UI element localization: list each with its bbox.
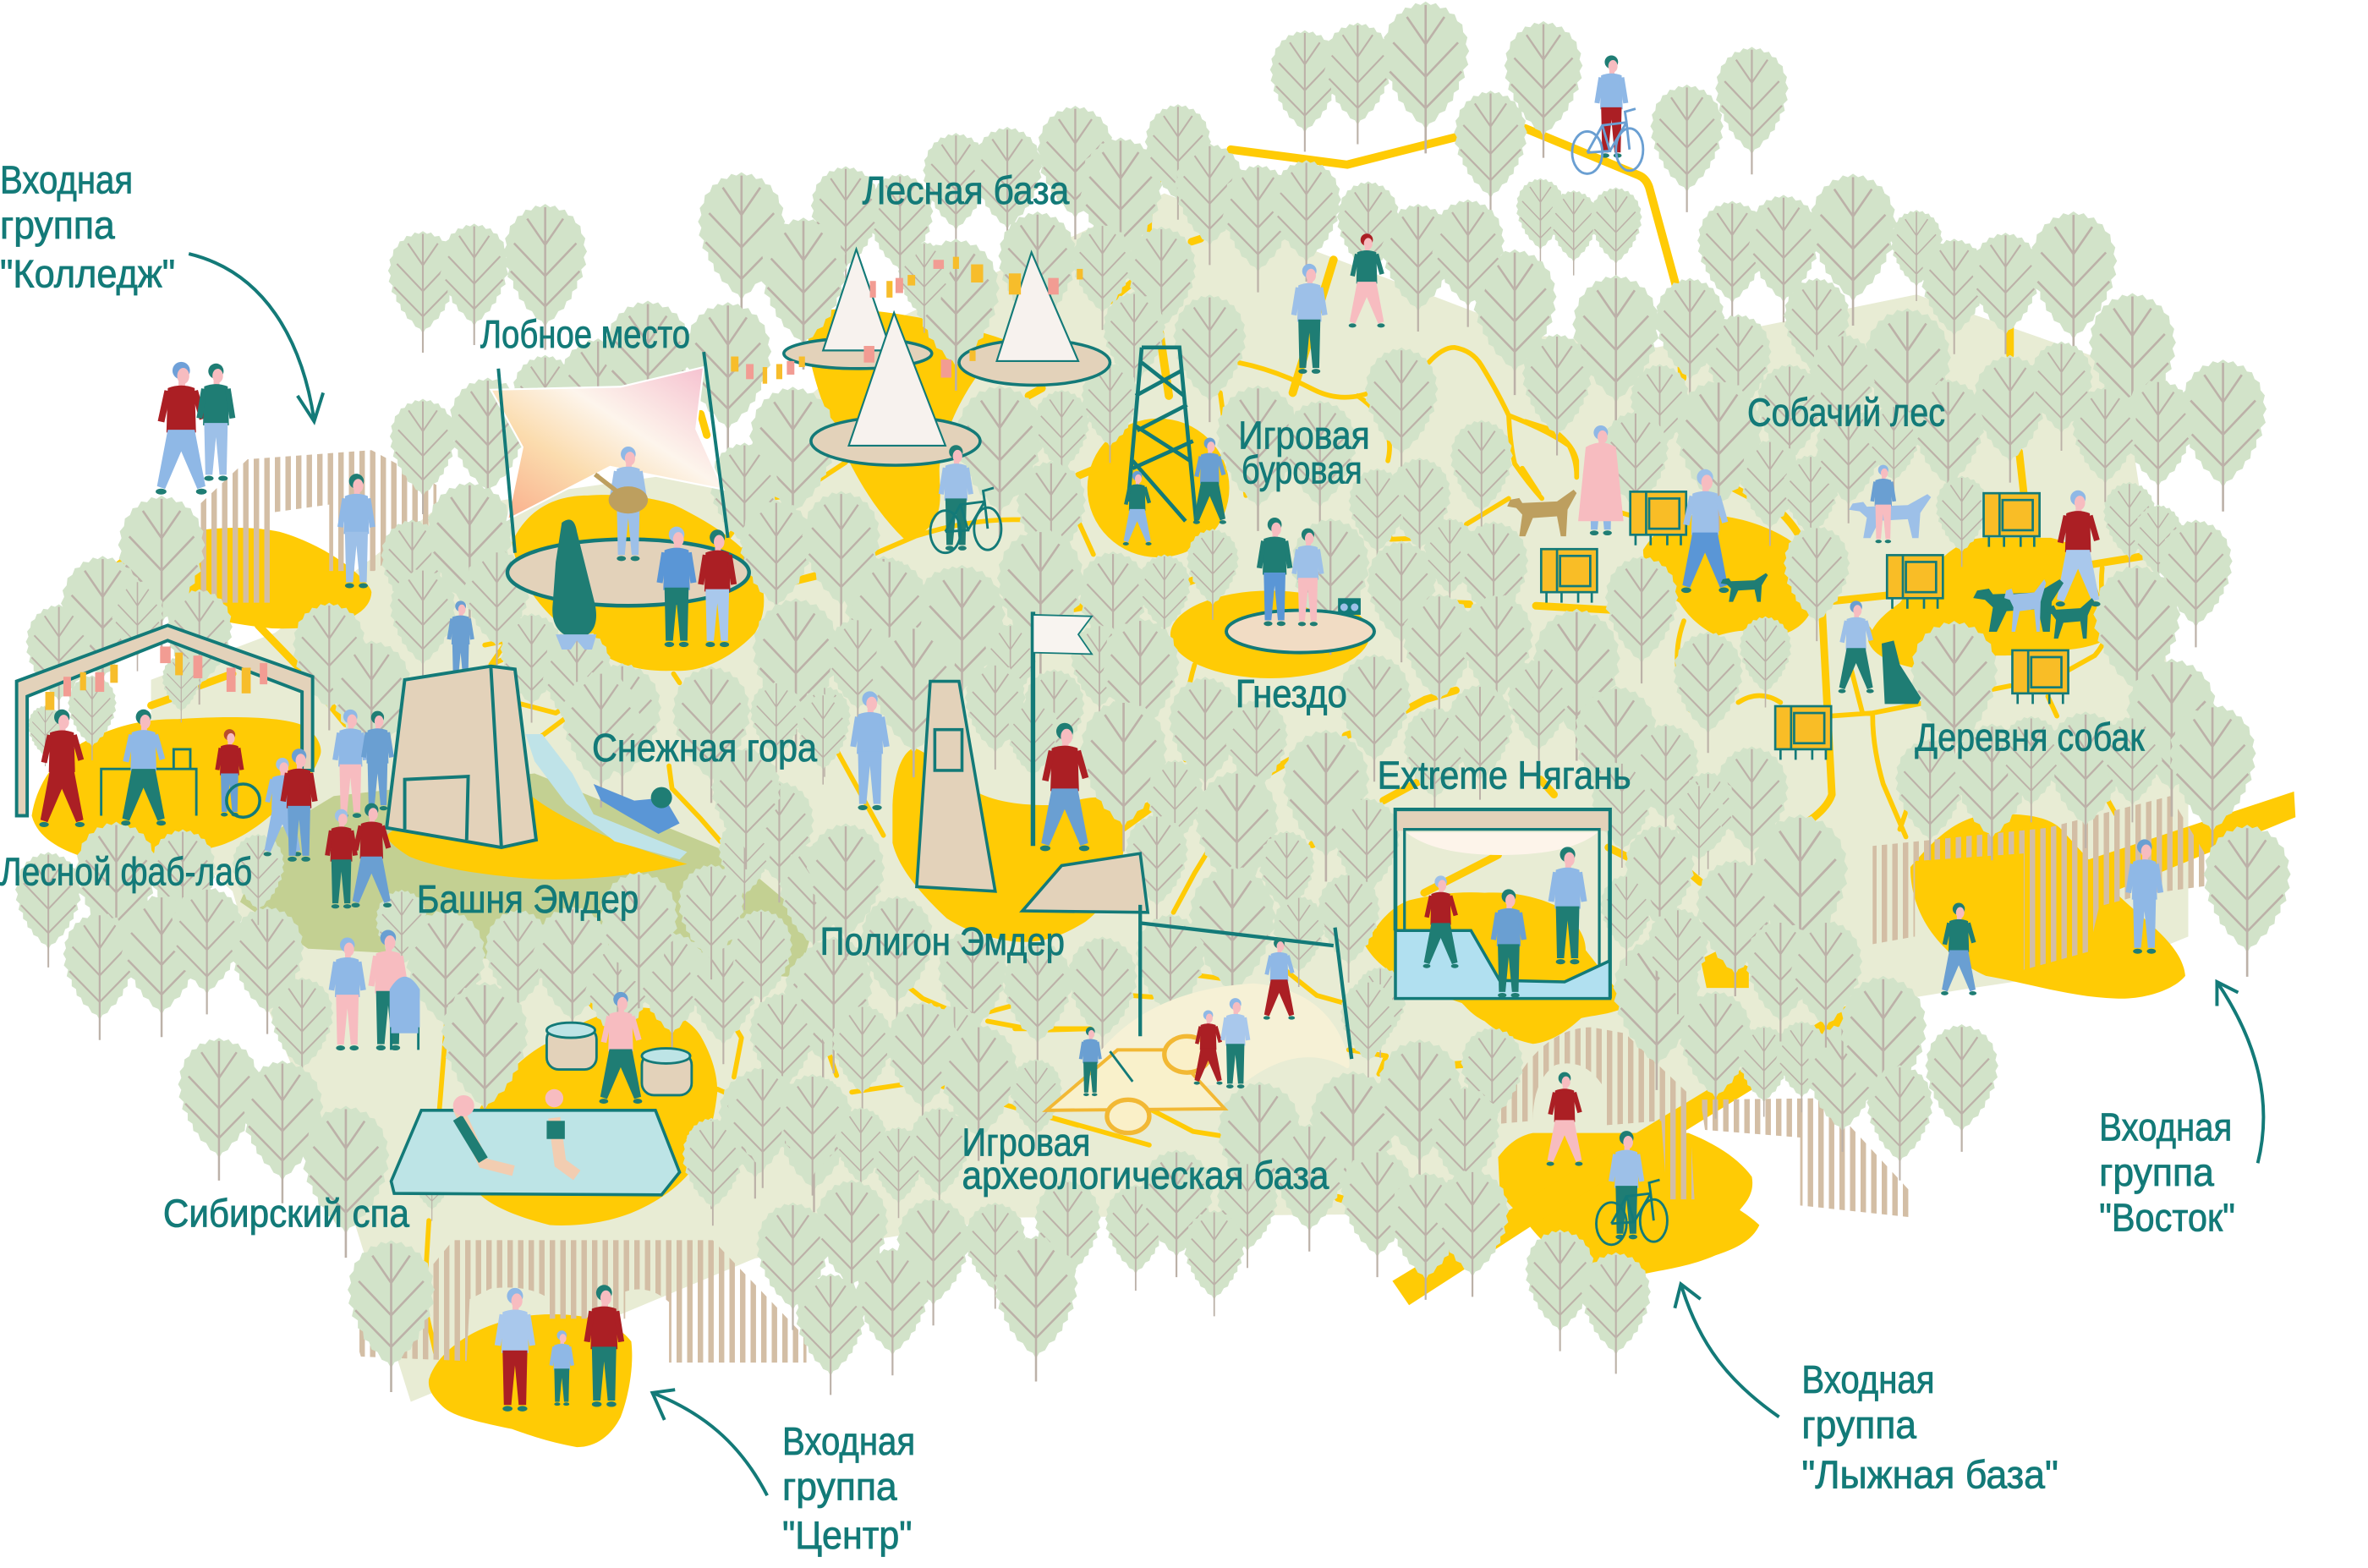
stroller couple (332, 930, 419, 1050)
label: Входная группа Центр (782, 1419, 915, 1557)
arrow to Центр (652, 1390, 767, 1495)
pavilion frame (17, 625, 313, 816)
swing frame (1140, 905, 1351, 1059)
label: Входная группа Колледж: Входная (0, 158, 133, 202)
swimmers (453, 1089, 577, 1176)
musician with case (552, 519, 596, 650)
label: Входная группа Лыжная база: "Лыжная база" (1801, 1452, 2058, 1496)
label: Входная группа Восток: "Восток" (2099, 1196, 2235, 1240)
dog walker (1681, 469, 1729, 593)
drilling tower (1128, 348, 1196, 521)
tower players (1123, 437, 1226, 546)
cyclist near tents (930, 445, 1001, 553)
acrobat (1263, 938, 1295, 1020)
label: Входная группа Центр: группа (782, 1465, 897, 1509)
bunting (46, 646, 267, 710)
dog houses (1541, 491, 2069, 759)
label: Гнездо: Гнездо (1236, 672, 1347, 715)
yellow paths and roads (151, 129, 2145, 1357)
tower (386, 666, 536, 847)
label: Лесная база: Лесная база (863, 168, 1069, 212)
label: Сибирский спа: Сибирский спа (163, 1191, 409, 1235)
sand rounds (1107, 1036, 1209, 1133)
forest base tents (784, 249, 1110, 465)
olive hill around tower (240, 773, 814, 978)
label: Игровая буровая: буровая (1242, 448, 1362, 492)
sand dune (1096, 984, 1350, 1095)
digger (1081, 1027, 1132, 1096)
barrels (546, 1022, 692, 1095)
label: Входная группа Центр: Входная (782, 1419, 915, 1463)
guitarist (595, 447, 648, 561)
pool (391, 1110, 680, 1195)
stroller (390, 977, 419, 1050)
girl with blue dog (1849, 494, 1931, 538)
sail canopy (491, 367, 723, 519)
label: Лобное место: Лобное место (480, 312, 690, 356)
label: Снежная гора: Снежная гора (592, 726, 817, 770)
label: Входная группа Лыжная база (1801, 1357, 2058, 1496)
radio (1338, 598, 1361, 615)
person in red (701, 529, 734, 647)
label: Игровая буровая (1238, 413, 1370, 492)
scene: Башня Эмдер (264, 600, 687, 908)
yellow activity patches (32, 309, 2295, 1447)
cyclist on top road (1572, 55, 1643, 173)
ramp (1022, 853, 1148, 913)
label: Входная группа Колледж (0, 158, 175, 295)
man at flag (1040, 723, 1089, 851)
scene: Гнездо dancers (1226, 518, 1374, 653)
dig site (1047, 1050, 1225, 1110)
person with backpack (660, 527, 693, 647)
label: Игровая археологическая база (962, 1120, 1329, 1198)
scene: dog forest (1507, 425, 2101, 759)
scene: Лобное место stage (491, 352, 749, 650)
entrance people Восток (1941, 839, 2161, 995)
arrow to Восток (2217, 982, 2263, 1163)
skaters (1423, 875, 1459, 968)
label: Входная группа Восток: Входная (2099, 1105, 2232, 1149)
tent platforms (784, 338, 1110, 465)
label: Башня Эмдер: Башня Эмдер (417, 877, 639, 921)
label: Входная группа Центр: "Центр" (782, 1513, 913, 1557)
label: Игровая археологическая база: археологическая база (962, 1154, 1329, 1198)
label: Собачий лес: Собачий лес (1747, 391, 1945, 435)
tents (823, 249, 1078, 446)
scene: Полигон Эмдер (853, 611, 1148, 913)
label: Входная группа Колледж: группа (0, 203, 115, 247)
label: Деревня собак: Деревня собак (1915, 715, 2145, 759)
person phoning (39, 710, 85, 827)
photographer (449, 600, 472, 683)
bath attendant (599, 992, 642, 1104)
flag (1033, 611, 1092, 846)
wooden slat fences (200, 450, 2223, 1362)
entrance couple Колледж (156, 362, 233, 495)
woman in pink coat (1578, 425, 1624, 535)
arrow to Колледж (189, 254, 323, 421)
obelisk (917, 682, 995, 891)
entrance people Лыжная база (1547, 1072, 1667, 1245)
walkers on the meadow (1294, 233, 1384, 374)
ice slide (525, 734, 687, 859)
stage platform (507, 540, 749, 606)
child on slide (594, 784, 680, 834)
label: Входная группа Лыжная база: Входная (1801, 1357, 1935, 1401)
work table (101, 749, 196, 816)
bunting flags (731, 257, 1083, 384)
label: Extreme Нягань: Extreme Нягань (1378, 753, 1631, 797)
label: Входная группа Лыжная база: группа (1801, 1402, 1916, 1446)
label: Лесной фаб-лаб: Лесной фаб-лаб (0, 850, 252, 894)
scene: Сибирский спа (391, 992, 692, 1195)
label: Игровая буровая: Игровая (1238, 413, 1370, 457)
label: Входная группа Восток: группа (2099, 1150, 2214, 1194)
tan dog (1507, 490, 1576, 536)
label: Полигон Эмдер: Полигон Эмдер (820, 919, 1065, 963)
skate ramp (1395, 930, 1610, 999)
dance platform (1226, 611, 1374, 653)
arrow to Лыжная база (1675, 1284, 1779, 1417)
scene: Лесной фаб-лаб (17, 625, 313, 827)
person with bag (340, 474, 372, 589)
label: Игровая археологическая база: Игровая (962, 1120, 1090, 1164)
park ground (151, 194, 2188, 1402)
frame roof (1395, 809, 1610, 999)
label: Входная группа Восток (2099, 1105, 2235, 1240)
label: Входная группа Колледж: "Колледж" (0, 251, 175, 295)
couple (1194, 1010, 1223, 1085)
scene: Extreme Нягань (1395, 809, 1610, 999)
scene: archaeology base (1047, 905, 1351, 1133)
canopy (1406, 832, 1598, 855)
person at table (121, 710, 166, 825)
visitors group (264, 710, 392, 908)
boy with sitting dog (1839, 600, 1874, 694)
canopy poles (498, 352, 728, 553)
woman with three dogs (2056, 491, 2101, 606)
entrance family Центр (497, 1285, 622, 1412)
man in kimono (853, 691, 886, 810)
wheelchair user (217, 729, 260, 817)
